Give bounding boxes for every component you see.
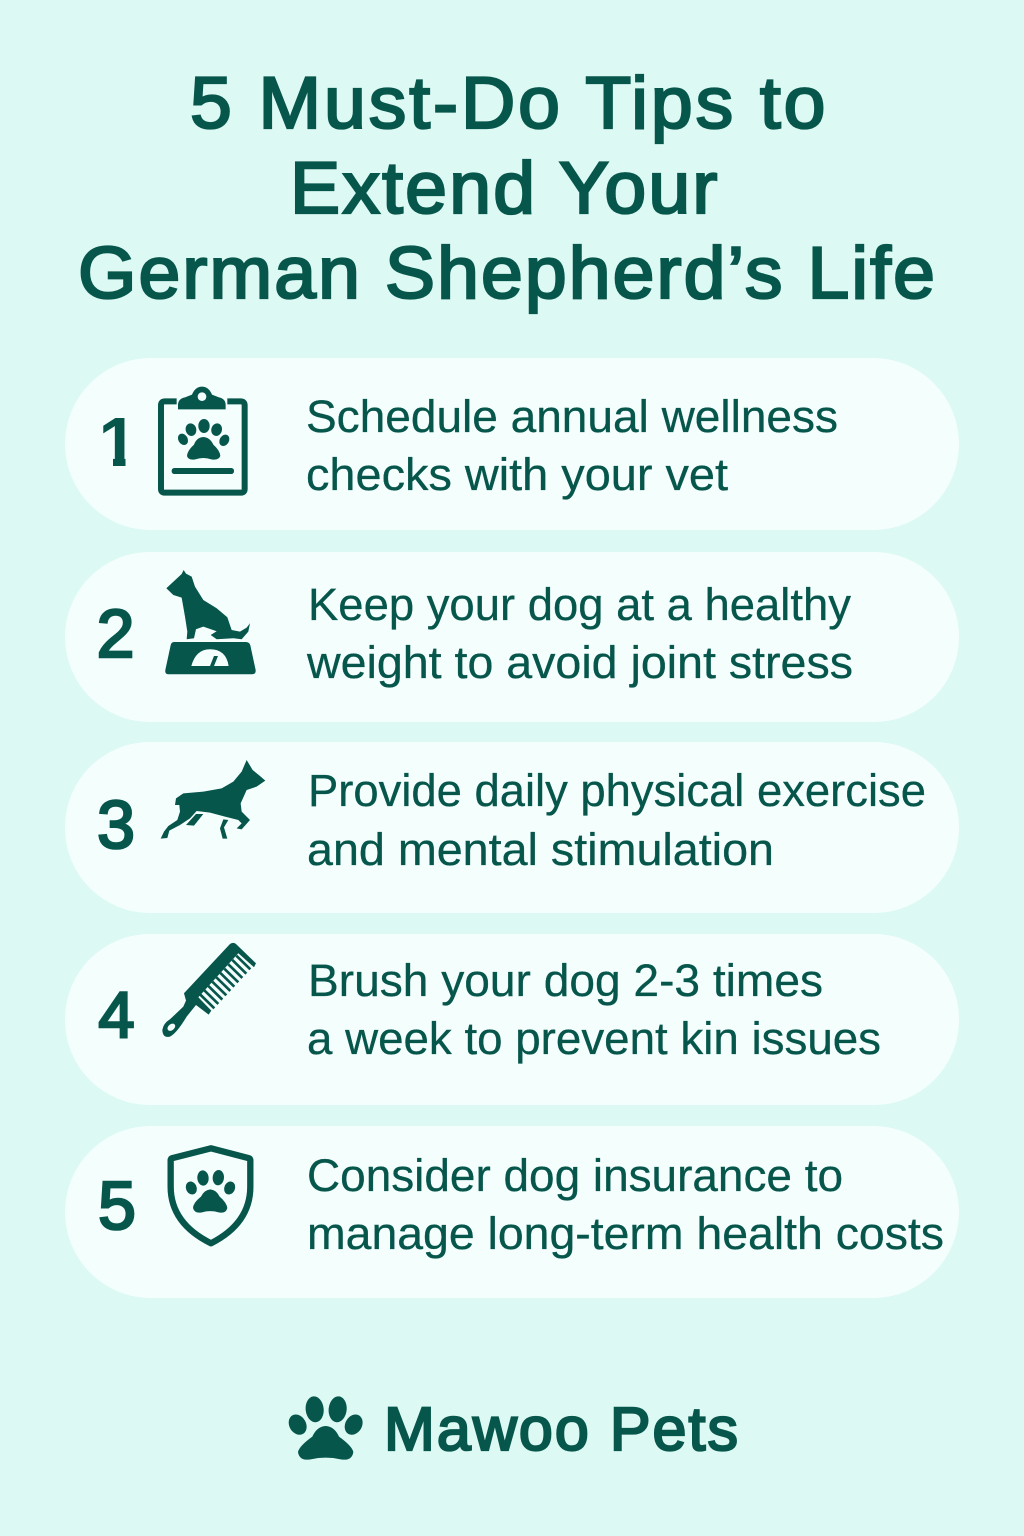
title: German Shepherd’s Life bbox=[78, 232, 935, 314]
icon: dog on scale bbox=[165, 570, 256, 674]
tip texts: Consider dog insurance to bbox=[307, 1150, 843, 1201]
icon: clipboard with paw bbox=[161, 387, 245, 493]
panel: tip 2 bbox=[65, 552, 959, 722]
tip texts: a week to prevent kin issues bbox=[307, 1013, 881, 1064]
tip texts bbox=[306, 391, 944, 1259]
number 5: 5 bbox=[98, 1168, 136, 1244]
icon: logo paw bbox=[285, 1395, 366, 1460]
tip texts: Schedule annual wellness bbox=[306, 391, 838, 442]
panel: tip 1 bbox=[65, 358, 959, 530]
tip texts: Keep your dog at a healthy bbox=[308, 579, 852, 630]
title: 5 Must-Do Tips to bbox=[190, 62, 826, 144]
panel: tip 3 bbox=[65, 742, 959, 913]
tip texts: Provide daily physical exercise bbox=[308, 765, 926, 816]
tip texts: weight to avoid joint stress bbox=[306, 637, 853, 688]
number 1: 1 bbox=[99, 403, 137, 481]
number 2: 2 bbox=[97, 596, 134, 672]
panel: tip 4 bbox=[65, 934, 959, 1105]
number 4: 4 bbox=[98, 978, 135, 1051]
logo: Mawoo Pets bbox=[285, 1395, 738, 1463]
icon: shield with paw bbox=[171, 1148, 250, 1243]
title: Extend Your bbox=[290, 147, 717, 229]
tip texts: checks with your vet bbox=[306, 449, 729, 500]
tip texts: Brush your dog 2-3 times bbox=[308, 955, 823, 1006]
number 3: 3 bbox=[97, 787, 135, 863]
tip texts: and mental stimulation bbox=[307, 824, 774, 875]
panel: tip 5 bbox=[65, 1126, 959, 1298]
icon: running dog bbox=[161, 760, 265, 839]
icon: comb bbox=[162, 943, 256, 1037]
tip texts: manage long-term health costs bbox=[307, 1208, 944, 1259]
brand name: Mawoo Pets bbox=[384, 1395, 738, 1463]
title bbox=[78, 62, 935, 314]
